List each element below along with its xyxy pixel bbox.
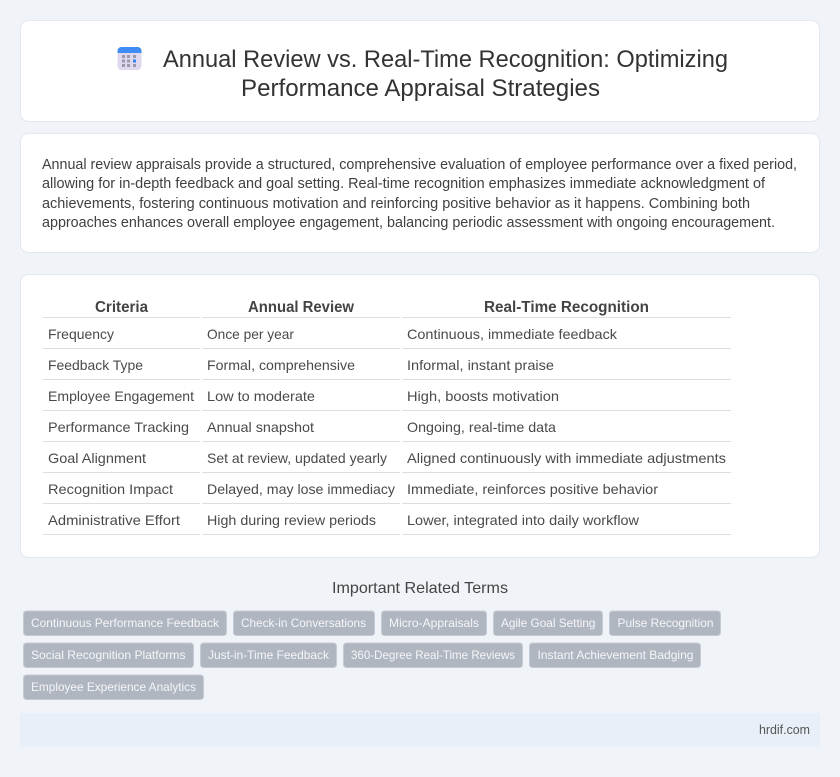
row: Goal Alignment xyxy=(48,450,726,466)
panel: summary paragraph xyxy=(20,134,820,252)
table header: Annual Review xyxy=(248,299,355,316)
row: Performance Tracking: Ongoing, real-time data xyxy=(407,419,556,435)
row: Employee Engagement: High, boosts motivation xyxy=(407,388,559,404)
tag xyxy=(234,611,374,636)
icon: calendar xyxy=(118,47,142,70)
row: Feedback Type xyxy=(48,357,554,373)
row: Goal Alignment: Goal Alignment xyxy=(48,450,146,466)
text block: summary xyxy=(42,157,797,231)
panel: comparison table xyxy=(20,274,820,558)
row: Performance Tracking xyxy=(48,419,556,435)
tag: Pulse Recognition xyxy=(618,616,714,630)
row: Frequency: Once per year xyxy=(207,326,294,342)
row: Goal Alignment: Aligned continuously with immediate adjustments xyxy=(407,450,726,466)
text block: summary: achievements, fostering continuous motivation and reinforcing positive behavior as it happens. Combining both xyxy=(42,196,750,212)
text block: summary: approaches enhances overall employee engagement, balancing periodic assessment with ongoing encouragement. xyxy=(42,215,775,231)
tag xyxy=(24,675,204,700)
row: Feedback Type: Feedback Type xyxy=(48,357,143,373)
row: Recognition Impact: Delayed, may lose immediacy xyxy=(207,481,395,497)
tag: Social Recognition Platforms xyxy=(31,648,186,662)
table rules xyxy=(43,317,731,535)
row: Feedback Type: Informal, instant praise xyxy=(407,357,554,373)
row: Recognition Impact xyxy=(48,481,658,497)
row: Frequency: Continuous, immediate feedback xyxy=(407,326,618,342)
tag: Just-in-Time Feedback xyxy=(208,648,330,662)
row: Administrative Effort: Administrative Effort xyxy=(48,512,180,528)
title: Performance Appraisal Strategies xyxy=(241,75,600,102)
tag: Employee Experience Analytics xyxy=(31,680,196,694)
text block: summary: allowing for in-depth feedback and goal setting. Real-time recognition emphasizes immediate acknowledgment of xyxy=(42,176,766,192)
row: Recognition Impact: Immediate, reinforces positive behavior xyxy=(407,481,658,497)
title xyxy=(163,46,728,102)
row: Goal Alignment: Set at review, updated yearly xyxy=(207,450,387,466)
row: Administrative Effort: High during review periods xyxy=(207,512,376,528)
tags: related terms xyxy=(24,611,720,700)
tag: Check-in Conversations xyxy=(241,616,366,630)
footer source: hrdif.com xyxy=(759,722,810,737)
tag xyxy=(344,643,522,668)
tag xyxy=(200,643,336,668)
row: Administrative Effort: Lower, integrated into daily workflow xyxy=(407,512,640,528)
footer bar xyxy=(20,713,820,747)
title: Annual Review vs. Real-Time Recognition: Optimizing xyxy=(163,46,728,73)
tag: 360-Degree Real-Time Reviews xyxy=(351,648,515,662)
row: Performance Tracking: Annual snapshot xyxy=(207,419,314,435)
row: Administrative Effort xyxy=(48,512,640,528)
tag: Continuous Performance Feedback xyxy=(31,616,220,630)
row: Feedback Type: Formal, comprehensive xyxy=(207,357,355,373)
tag: Instant Achievement Badging xyxy=(538,648,694,662)
text block: summary: Annual review appraisals provide a structured, comprehensive evaluation of employee performance over a fixed period, xyxy=(42,157,797,173)
row: Employee Engagement xyxy=(48,388,559,404)
row: Recognition Impact: Recognition Impact xyxy=(48,481,173,497)
table header xyxy=(95,299,649,316)
tag xyxy=(530,643,700,668)
tag xyxy=(24,611,226,636)
table header: Criteria xyxy=(95,299,148,316)
row: Performance Tracking: Performance Tracking xyxy=(48,419,189,435)
tag: Micro-Appraisals xyxy=(389,616,479,630)
row: Employee Engagement: Employee Engagement xyxy=(48,388,194,404)
tag xyxy=(24,643,194,668)
row: Frequency: Frequency xyxy=(48,326,114,342)
panel: title header xyxy=(20,20,820,122)
tag xyxy=(382,611,486,636)
heading: related terms: Important Related Terms xyxy=(332,580,508,597)
tag xyxy=(610,611,720,636)
table header: Real-Time Recognition xyxy=(484,299,649,316)
row: Frequency xyxy=(48,326,618,342)
row: Employee Engagement: Low to moderate xyxy=(207,388,315,404)
tag: Agile Goal Setting xyxy=(501,616,596,630)
tag xyxy=(494,611,602,636)
